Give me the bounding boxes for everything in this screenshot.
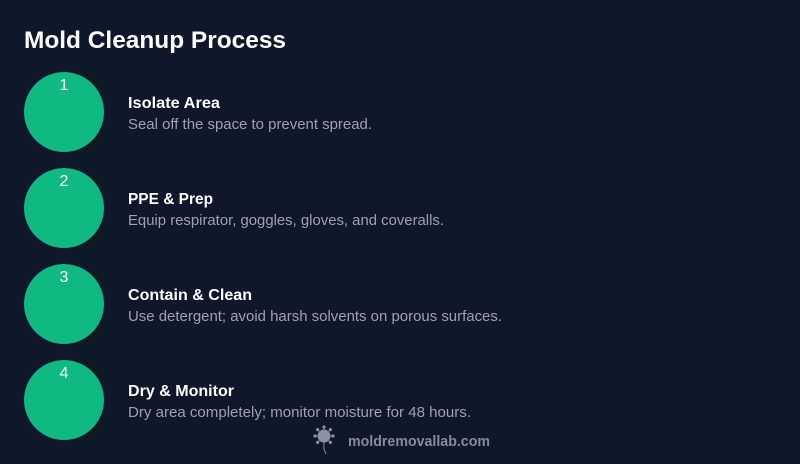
step 2 description: Equip respirator, goggles, gloves, and coveralls. <box>128 213 444 229</box>
watermark text: moldremovallab.com <box>348 434 490 450</box>
step 1 <box>24 72 372 152</box>
step 3 description: Use detergent; avoid harsh solvents on porous surfaces. <box>128 309 502 325</box>
step 4 description: Dry area completely; monitor moisture for 48 hours. <box>128 405 471 421</box>
step 4 number: 4 <box>60 365 69 382</box>
step 1 circle <box>24 72 104 152</box>
step 4 circle <box>24 360 104 440</box>
step 2 circle <box>24 168 104 248</box>
step 1 heading: Isolate Area <box>128 95 220 112</box>
step 4 heading: Dry & Monitor <box>128 383 234 400</box>
title: Mold Cleanup Process <box>24 27 286 54</box>
step 1 description: Seal off the space to prevent spread. <box>128 117 372 133</box>
step 3 <box>24 264 502 344</box>
step 3 number: 3 <box>60 269 69 286</box>
step 3 heading: Contain & Clean <box>128 287 252 304</box>
step 2 number: 2 <box>60 173 69 190</box>
step 4 <box>24 360 471 440</box>
step 1 number: 1 <box>60 77 69 94</box>
step 3 circle <box>24 264 104 344</box>
step 2 heading: PPE & Prep <box>128 191 213 208</box>
icon: dandelion logo <box>313 425 335 454</box>
step 2 <box>24 168 444 248</box>
